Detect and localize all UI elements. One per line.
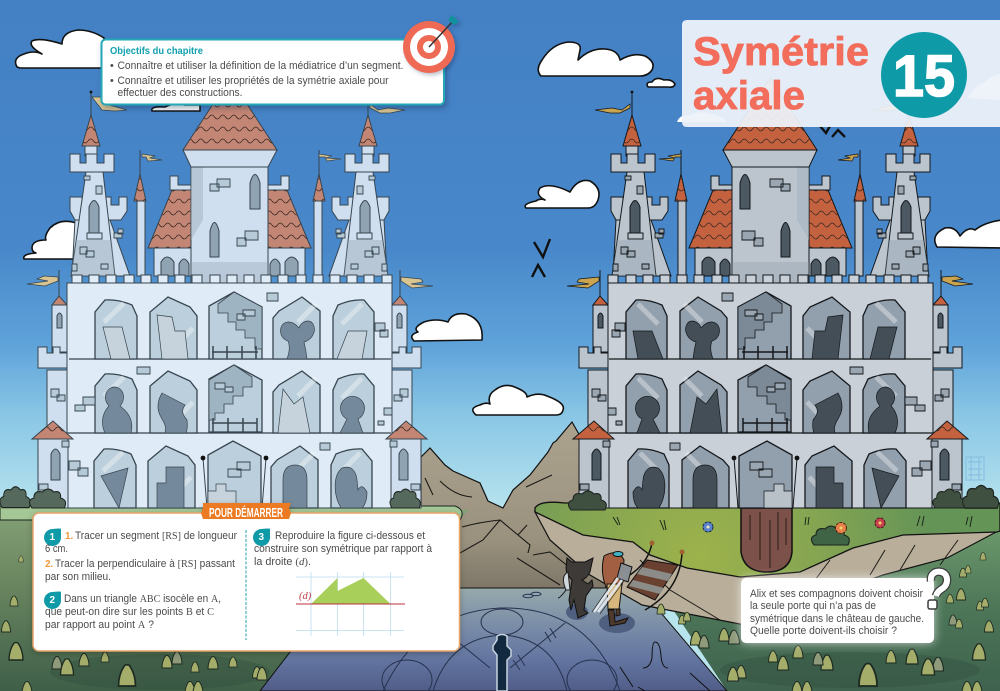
central blue-grey plateau	[260, 588, 727, 691]
exercise 1: par son milieu.	[45, 571, 111, 583]
exercise 1	[44, 528, 237, 583]
cliff cracks	[640, 540, 958, 620]
chapter number badge: 15	[893, 44, 955, 109]
chapter number badge	[881, 32, 967, 118]
objectives list	[110, 60, 404, 99]
figure: polygon on grid with axis d: (d)	[299, 591, 312, 602]
mountains in the valley	[300, 422, 660, 590]
character: cat companion	[558, 558, 593, 620]
objectives box	[102, 40, 444, 104]
objectives list: Connaître et utiliser la définition de la médiatrice d’un segment.	[118, 60, 404, 72]
exercise 3: construire son symétrique par rapport à	[254, 543, 432, 555]
exercise 3: la droite (d).	[254, 556, 311, 568]
grass tufts	[613, 516, 972, 530]
callout: story question: symétrique dans le château de gauche.	[750, 613, 924, 625]
wooden door bottom	[741, 508, 792, 572]
exercise 3	[253, 528, 432, 568]
callout: story question: Quelle porte doivent-ils choisir ?	[750, 625, 897, 637]
clouds: left page	[16, 30, 482, 341]
objectives list: Connaître et utiliser les propriétés de la symétrie axiale pour	[118, 75, 389, 87]
right plateau cliff	[535, 512, 1000, 625]
title banner	[682, 20, 1000, 127]
exercise 1: 2.	[45, 559, 54, 570]
exercise 2: 2	[50, 595, 56, 606]
exercise 1: 1.	[65, 531, 74, 542]
flowers	[703, 518, 885, 534]
callout: story question: Alix et ses compagnons doivent choisir	[750, 588, 923, 600]
trees: right ground	[657, 552, 994, 691]
rock ridges	[425, 475, 583, 585]
objectives list: •	[110, 75, 114, 87]
objectives list: effectuer des constructions.	[118, 87, 242, 99]
objectives heading: Objectifs du chapitre	[110, 45, 203, 57]
title text	[693, 30, 869, 118]
right lower ground	[640, 525, 1000, 691]
exercise 1: 6 cm.	[45, 543, 68, 555]
birds	[532, 126, 845, 277]
panel tag	[201, 503, 291, 520]
right castle	[567, 78, 973, 508]
clouds: right page	[473, 42, 1000, 415]
callout: story question	[741, 578, 934, 643]
left ground	[0, 510, 470, 691]
figure: polygon on grid with axis d	[296, 572, 405, 636]
exercise 2: Dans un triangle ABC isocèle en A,	[64, 593, 221, 605]
exercise 2: par rapport au point A ?	[45, 619, 154, 631]
icon: target with arrow	[403, 15, 459, 73]
exercise 1: Tracer la perpendiculaire à [RS] passant	[55, 558, 235, 570]
exercise 3: 3	[258, 532, 264, 543]
character: Alix with backpack	[592, 552, 635, 633]
left plateau strip	[0, 506, 462, 520]
callout: story question: la seule porte qui n’a pas de	[750, 600, 876, 612]
grass top of plateau	[535, 502, 1000, 577]
illustrator stamp	[966, 457, 984, 480]
title text: axiale	[693, 74, 805, 118]
panel tag: POUR DÉMARRER	[209, 505, 283, 520]
geometric circles on the plateau	[382, 592, 710, 691]
icon: question mark	[928, 572, 947, 609]
panel: pour démarrer	[33, 503, 460, 651]
objectives list: •	[110, 60, 114, 72]
left castle	[27, 78, 433, 508]
drawbridge	[625, 540, 684, 610]
trees: left ground	[1, 556, 267, 691]
exercise 1: Tracer un segment [RS] de longueur	[75, 530, 237, 542]
exercise 2	[44, 592, 221, 631]
central shadow figure	[493, 634, 511, 691]
dark ground shadows	[50, 652, 980, 690]
exercise 1: 1	[50, 532, 56, 543]
exercise 2: que peut-on dire sur les points B et C	[45, 606, 214, 618]
bushes	[0, 485, 999, 545]
title text: Symétrie	[693, 30, 869, 74]
exercise 3: Reproduire la figure ci-dessous et	[275, 530, 425, 542]
